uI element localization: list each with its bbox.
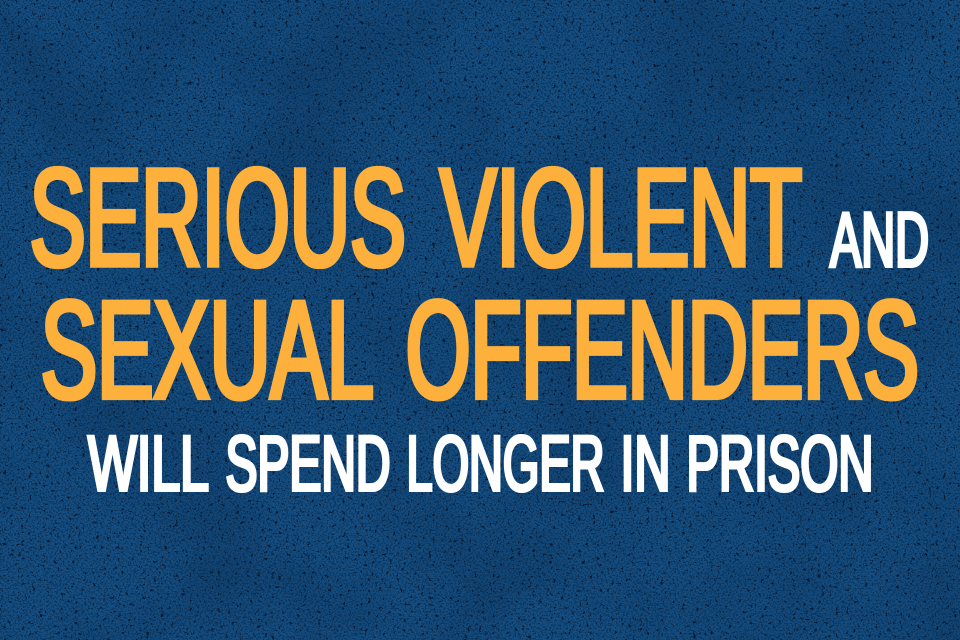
subheading word: in: IN (620, 418, 670, 507)
heading word: serious: SERIOUS (30, 139, 406, 296)
subheading word: spend: SPEND (226, 418, 390, 507)
heading word: sexual: SEXUAL (41, 271, 374, 428)
subheading word: will: WILL (88, 418, 209, 507)
subheading word: longer: LONGER (406, 418, 604, 507)
subheading: will spend longer in prison (88, 418, 874, 507)
headline (30, 139, 929, 507)
